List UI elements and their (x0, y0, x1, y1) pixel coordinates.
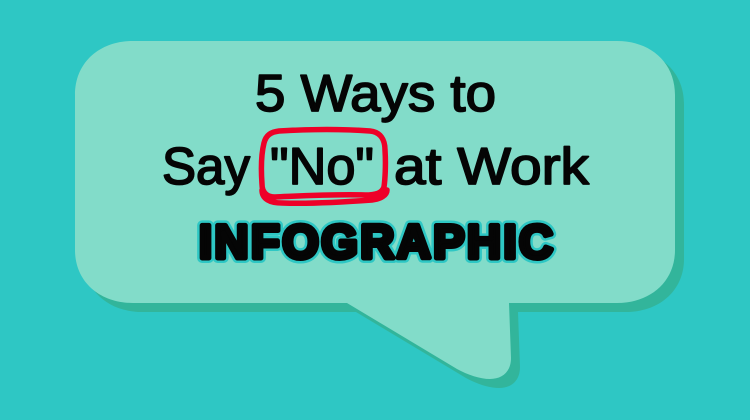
heading line 2: no: "No" (270, 138, 374, 196)
speech bubble shadow (84, 50, 684, 388)
heading line 2: at work: at Work (394, 138, 590, 196)
infographic subheading outline: INFOGRAPHIC (199, 215, 553, 268)
heading line 1: 5 Ways to (255, 65, 496, 123)
infographic subheading fill: INFOGRAPHIC (199, 215, 553, 268)
speech bubble (75, 41, 675, 379)
red hand-drawn circle around No (261, 130, 387, 203)
heading line 2: say: Say (162, 138, 250, 196)
